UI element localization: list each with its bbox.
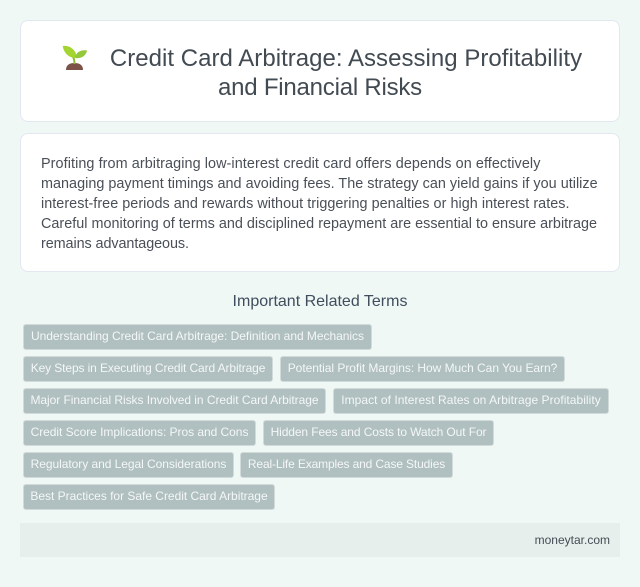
text block: summary: interest-free periods and rewards without triggering penalties or high interest rates. xyxy=(41,196,570,212)
tag: Impact of Interest Rates on Arbitrage Profitability xyxy=(341,393,601,407)
tag: Hidden Fees and Costs to Watch Out For xyxy=(271,425,486,439)
tag xyxy=(23,324,372,350)
tag: Major Financial Risks Involved in Credit Card Arbitrage xyxy=(30,393,319,407)
panel: title card xyxy=(20,20,620,122)
text block: summary xyxy=(41,156,598,252)
text block: summary: Careful monitoring of terms and disciplined repayment are essential to ensure arbitrage xyxy=(41,216,597,232)
tag: Best Practices for Safe Credit Card Arbitrage xyxy=(30,489,268,503)
tag xyxy=(23,388,326,414)
tag xyxy=(23,452,234,478)
heading: title line 1: Credit Card Arbitrage: Assessing Profitability xyxy=(110,45,582,72)
tag xyxy=(23,420,256,446)
tag: Understanding Credit Card Arbitrage: Definition and Mechanics xyxy=(31,329,364,343)
heading: important related terms: Important Related Terms xyxy=(233,293,407,310)
tag xyxy=(280,356,565,382)
tag: Potential Profit Margins: How Much Can You Earn? xyxy=(288,361,557,375)
tag xyxy=(23,356,273,382)
icon: seedling xyxy=(62,46,87,70)
text block: summary: managing payment timings and avoiding fees. The strategy can yield gains if you utilize xyxy=(41,176,598,192)
tag: Credit Score Implications: Pros and Cons xyxy=(31,425,248,439)
text block: summary: remains advantageous. xyxy=(41,236,189,252)
tag: Real-Life Examples and Case Studies xyxy=(248,457,445,471)
text block: summary: Profiting from arbitraging low-interest credit card offers depends on effectively xyxy=(41,156,540,172)
tag list xyxy=(23,324,609,510)
tag xyxy=(333,388,609,414)
tag xyxy=(23,484,275,510)
panel: summary card xyxy=(20,133,620,272)
tag xyxy=(240,452,453,478)
tag: Key Steps in Executing Credit Card Arbitrage xyxy=(31,361,265,375)
tag xyxy=(263,420,494,446)
tag: Regulatory and Legal Considerations xyxy=(31,457,226,471)
footer text: site name: moneytar.com xyxy=(535,533,610,547)
heading: title line 2: and Financial Risks xyxy=(218,74,422,101)
footer bar xyxy=(20,523,620,557)
